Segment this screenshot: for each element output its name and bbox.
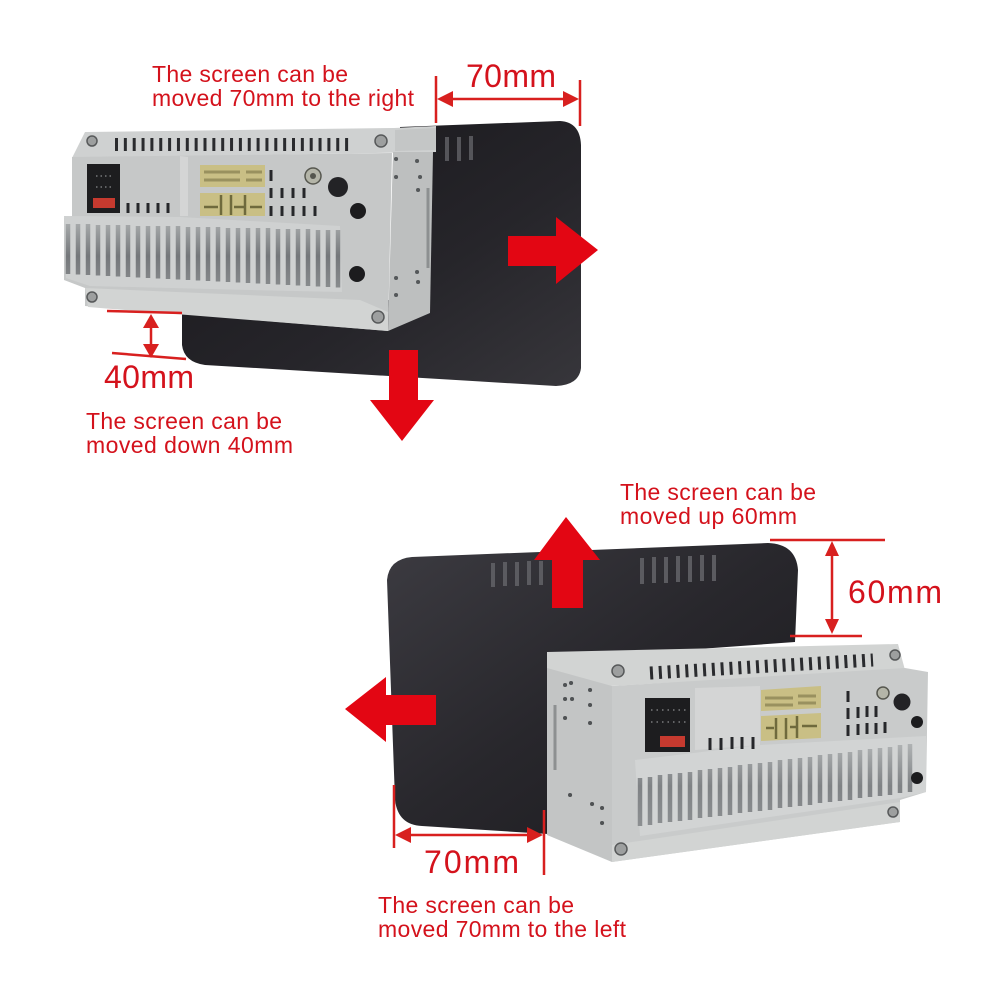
black power connector — [645, 698, 690, 752]
caption: moved down: The screen can be — [86, 408, 282, 434]
screws — [612, 650, 900, 855]
caption: moved down — [86, 408, 293, 458]
label: 70mm top: 70mm — [466, 58, 556, 94]
antenna socket — [305, 168, 321, 184]
arrow: screen moves down — [370, 350, 434, 441]
vent row — [650, 660, 873, 673]
yellow connectors — [200, 165, 265, 187]
caption: moved up: The screen can be — [620, 479, 816, 505]
caption: moved left — [378, 892, 627, 942]
top device: car radio moved right and down — [64, 121, 581, 386]
caption: moved up: moved up 60mm — [620, 503, 797, 529]
side plate — [388, 152, 433, 331]
caption: moved left: The screen can be — [378, 892, 574, 918]
heat sink fins — [635, 736, 926, 836]
caption: moved left: moved 70mm to the left — [378, 916, 627, 942]
caption: moved up — [620, 479, 816, 529]
top plate — [72, 126, 436, 158]
label: 70mm bottom: 70mm — [424, 844, 519, 880]
rear screen housing — [182, 121, 581, 386]
caption: moved down: moved down 40mm — [86, 432, 293, 458]
vent row — [115, 138, 350, 151]
top plate — [547, 644, 905, 686]
yellow connectors — [761, 686, 821, 711]
label: 40mm: 40mm — [104, 359, 194, 395]
dimension: 70mm left — [394, 785, 544, 875]
black power connector — [87, 164, 120, 213]
bottom device: car radio moved up and left — [387, 543, 928, 862]
face plate — [612, 668, 928, 862]
screen vent slots — [493, 555, 714, 587]
arrow: screen moves right — [508, 217, 598, 284]
dimension: 40mm down — [107, 311, 186, 359]
dimension: 70mm right — [436, 76, 580, 126]
antenna socket — [877, 687, 889, 699]
caption: moved right: The screen can be — [152, 61, 348, 87]
arrow: screen moves up — [534, 517, 600, 608]
screen vent slots — [447, 136, 471, 161]
small vents — [710, 691, 885, 750]
face plate — [64, 153, 392, 331]
arrow: screen moves left — [345, 677, 436, 742]
round holes — [894, 694, 910, 710]
label: 60mm: 60mm — [848, 574, 942, 610]
caption: moved right — [152, 61, 415, 111]
heat sink fins — [64, 216, 342, 292]
small vents — [128, 170, 315, 216]
round holes — [328, 177, 348, 197]
screws — [87, 135, 387, 323]
rear screen housing — [387, 543, 798, 834]
side plate — [547, 668, 612, 862]
caption: moved right: moved 70mm to the right — [152, 85, 415, 111]
dimension: 60mm up — [770, 540, 885, 636]
